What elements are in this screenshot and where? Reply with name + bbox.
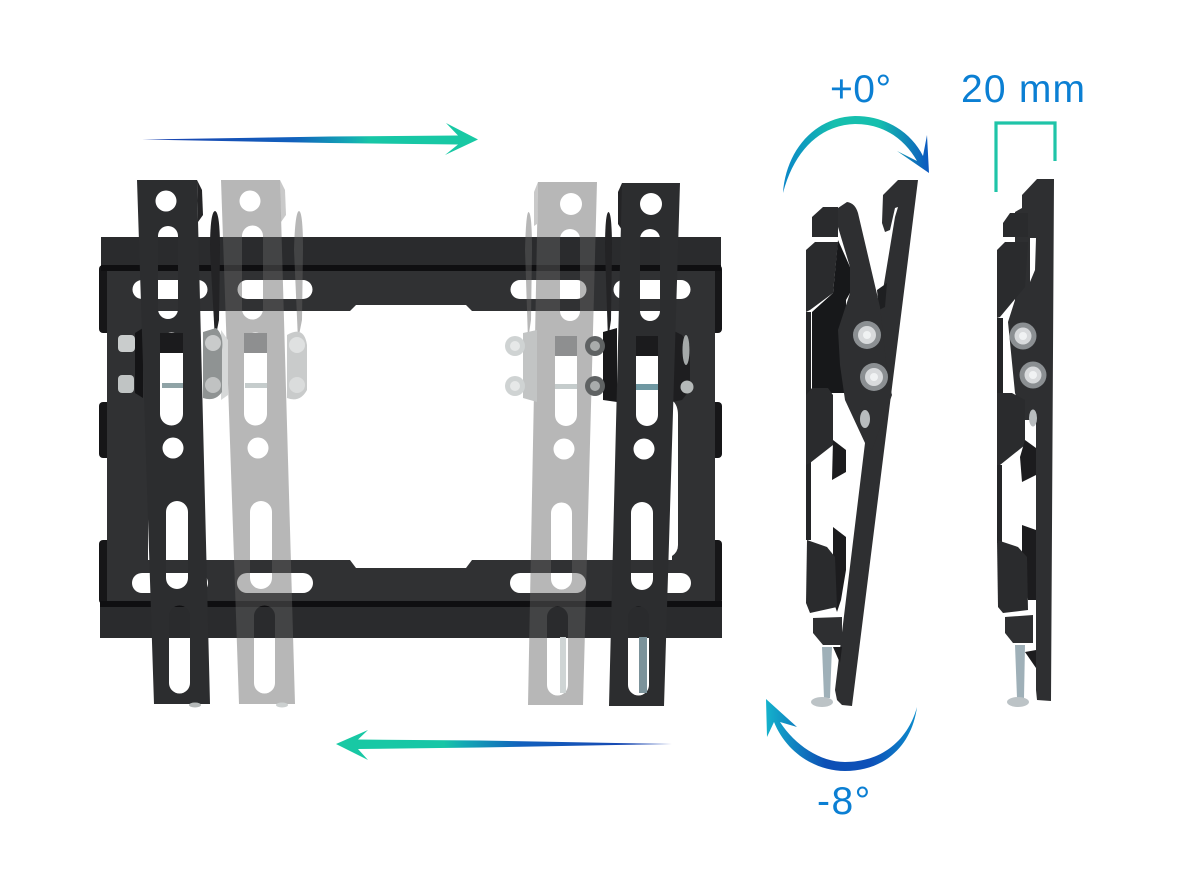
arrow: slide right xyxy=(142,123,478,155)
ghost bracket: left, tilted position xyxy=(221,180,307,708)
arrow: tilt up curve xyxy=(783,116,929,193)
bracket: left, solid xyxy=(118,180,222,708)
side view: tilted xyxy=(806,180,918,707)
ghost bracket: right, tilted position xyxy=(505,182,597,705)
dimension bracket xyxy=(996,123,1055,192)
label: +0 degrees: +0° xyxy=(830,68,892,111)
arrow: slide left xyxy=(336,730,672,760)
wall plate xyxy=(99,237,722,638)
bracket: right, solid xyxy=(585,183,694,706)
label: -8 degrees: -8° xyxy=(817,780,872,823)
label: depth 20 mm: 20 mm xyxy=(961,68,1086,111)
arrow: tilt down curve xyxy=(766,699,917,771)
side view: flat xyxy=(997,179,1054,707)
